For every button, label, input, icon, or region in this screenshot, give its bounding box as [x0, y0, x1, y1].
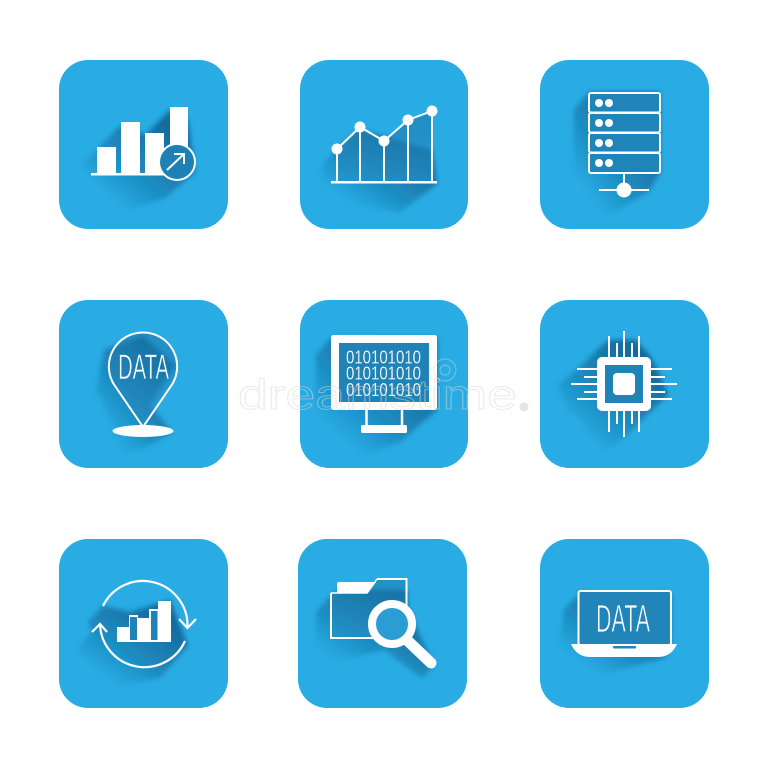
icon: folder	[331, 579, 406, 638]
icon: laptop screen	[578, 591, 671, 645]
binary digits: 010101010	[346, 348, 421, 368]
icon: monitor stand	[361, 410, 407, 433]
icon: pin outline	[109, 332, 177, 427]
panel: bar chart with arrow	[59, 60, 228, 229]
panel: folder search	[298, 539, 467, 708]
icon: rotating arrows	[92, 581, 196, 667]
icon: chip body	[597, 357, 651, 411]
icon shadow: monitor	[316, 338, 437, 456]
icon: rising bars	[91, 107, 188, 176]
icon: magnifier	[372, 604, 431, 663]
panel: refresh bar chart	[59, 539, 228, 708]
icon: laptop base	[571, 644, 677, 657]
watermark: dreamstime	[238, 371, 517, 418]
icon: chip pins	[571, 331, 677, 437]
icon shadow: bar chart	[82, 110, 195, 210]
panel: data location pin	[59, 300, 228, 468]
icon shadow: pin	[96, 336, 175, 456]
panel: microchip	[540, 300, 709, 468]
chart fill	[337, 111, 432, 181]
icon: network node	[599, 173, 649, 198]
icon: line chart	[331, 106, 438, 184]
panel: line chart	[300, 60, 468, 229]
panel: binary monitor	[300, 300, 468, 468]
panel: data laptop	[540, 539, 709, 708]
icon shadow: laptop	[560, 594, 671, 676]
icon: arrow badge	[159, 144, 195, 180]
watermark	[238, 359, 528, 418]
label: DATA: DATA	[118, 348, 169, 387]
binary digits: 010101010	[346, 380, 421, 400]
icon: pin base	[112, 425, 174, 437]
icon: bars	[117, 601, 171, 642]
label: DATA: DATA	[596, 598, 650, 641]
icon: monitor screen	[331, 335, 437, 410]
folder fill	[331, 579, 407, 638]
icon shadow: folder	[316, 590, 434, 678]
binary digits	[346, 348, 421, 400]
icon shadow: server	[574, 92, 660, 218]
panel: server	[540, 60, 709, 229]
binary digits: 010101010	[346, 364, 421, 384]
icon shadow: chip	[558, 340, 668, 450]
icon shadow: refresh chart	[76, 600, 188, 686]
icon shadow: line chart	[322, 130, 437, 212]
icon: server rack	[589, 93, 660, 173]
pin head fill	[109, 332, 177, 427]
